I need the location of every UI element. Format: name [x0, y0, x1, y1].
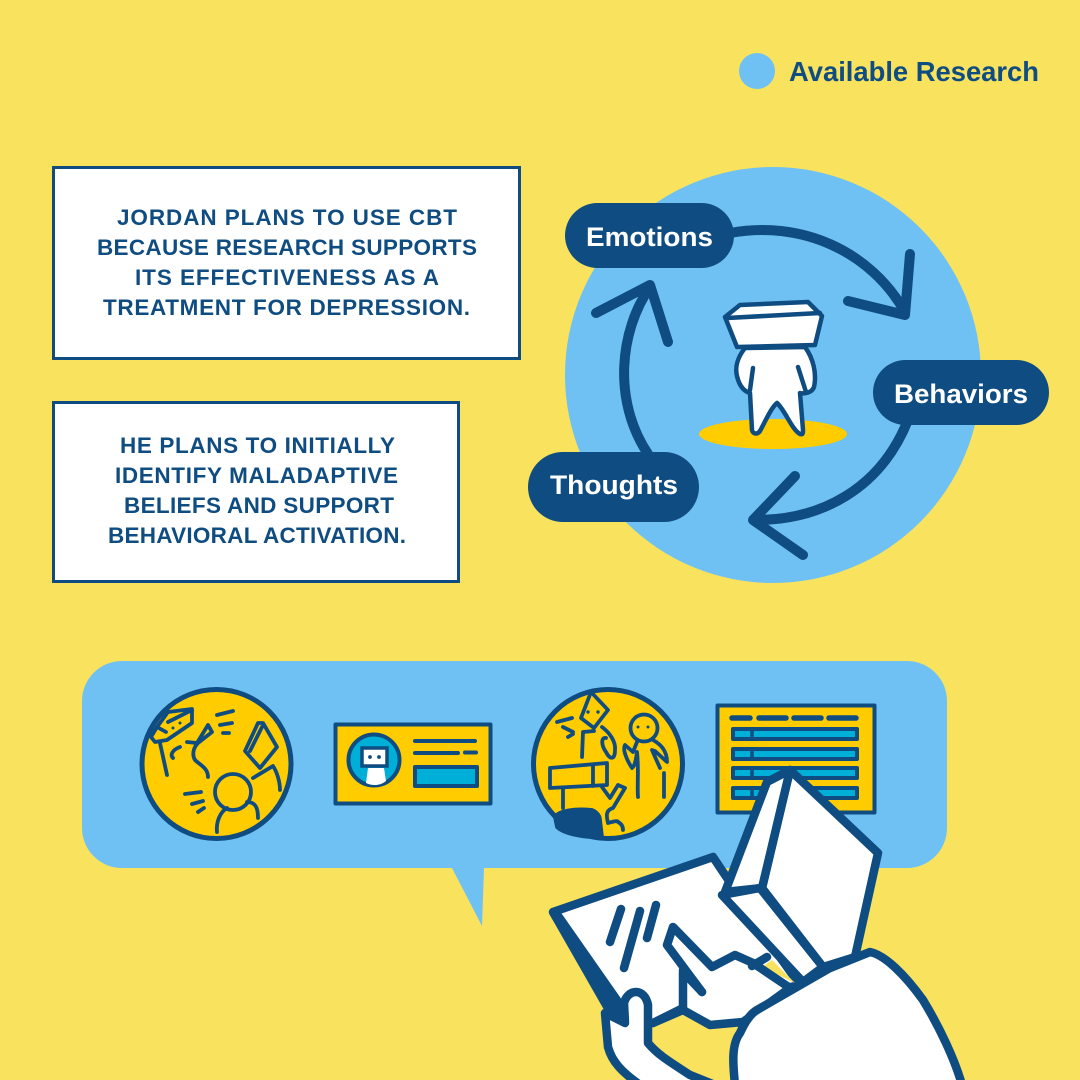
text box: initial plan: BEHAVIORAL ACTIVATION.	[108, 523, 406, 548]
pill: behaviors: Behaviors	[894, 379, 1028, 409]
reading hand	[667, 927, 790, 1025]
arrow: emotions to behaviors	[730, 230, 910, 315]
CBT cycle diagram	[528, 167, 1049, 583]
text box: initial plan: HE PLANS TO INITIALLY	[120, 433, 395, 458]
icon: group discussion circle	[142, 690, 291, 838]
left book page	[551, 857, 800, 1024]
pill: thoughts	[528, 452, 699, 522]
text box: research supports CBT: BECAUSE RESEARCH SUPPORTS	[97, 235, 477, 260]
icon: characters conversation circle	[534, 690, 682, 838]
legend: available research: Available Research	[789, 56, 1039, 87]
tooth character with box head	[699, 302, 847, 449]
icon: data table	[718, 706, 874, 812]
book cover right	[722, 770, 878, 982]
arrow: behaviors to thoughts	[753, 420, 908, 555]
text box: research supports CBT: ITS EFFECTIVENESS AS A	[135, 265, 439, 290]
speech bubble	[82, 661, 947, 926]
lower wrist line	[653, 1008, 683, 1023]
text box: research supports CBT: JORDAN PLANS TO USE CBT	[117, 205, 457, 230]
text box: research supports CBT: TREATMENT FOR DEPRESSION.	[103, 295, 470, 320]
illustration: hands holding open book	[551, 770, 962, 1080]
hand crease	[683, 957, 767, 992]
pill: thoughts: Thoughts	[550, 470, 678, 500]
yellow gap behind hand	[762, 960, 795, 983]
pill: emotions	[565, 203, 734, 268]
pill: behaviors	[873, 360, 1049, 425]
text box: research supports CBT	[54, 168, 520, 358]
text box: initial plan: BELIEFS AND SUPPORT	[124, 493, 394, 518]
pill: emotions: Emotions	[586, 222, 713, 252]
sleeve	[733, 952, 962, 1080]
arrow: thoughts to emotions	[596, 285, 668, 454]
text box: initial plan: IDENTIFY MALADAPTIVE	[115, 463, 398, 488]
left hand thumb	[605, 992, 715, 1080]
motion lines on page	[610, 905, 656, 968]
icon: profile card	[336, 724, 490, 804]
text box: initial plan	[54, 402, 458, 582]
background circle	[565, 167, 981, 583]
